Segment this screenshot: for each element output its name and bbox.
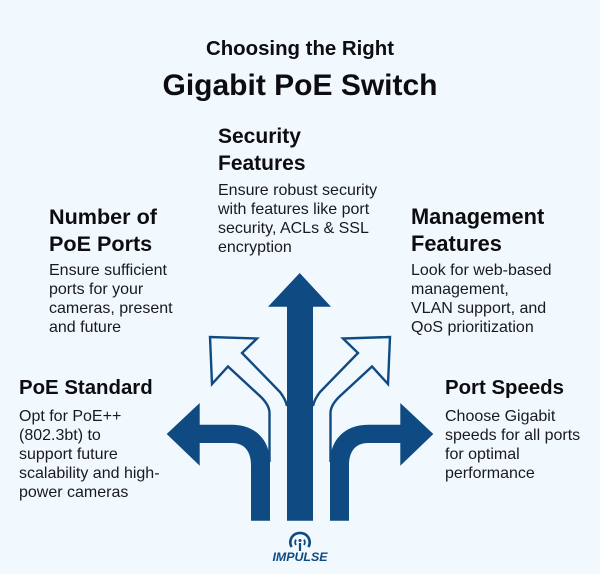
text: port speeds: performance bbox=[445, 465, 535, 482]
text: port speeds: for optimal bbox=[445, 446, 520, 463]
arrow: left outline bbox=[210, 337, 287, 462]
heading: number of PoE ports: Number of bbox=[49, 204, 157, 229]
text: number of PoE ports: ports for your bbox=[49, 281, 143, 298]
logo: Impulse bbox=[272, 532, 328, 564]
heading: management features: Management bbox=[411, 204, 544, 229]
panel: port speeds bbox=[445, 377, 580, 482]
arrow: left solid bbox=[167, 403, 270, 521]
heading: management features bbox=[411, 204, 544, 256]
text: security features: Ensure robust security bbox=[218, 182, 377, 199]
heading: security features bbox=[218, 125, 306, 175]
heading: number of PoE ports: PoE Ports bbox=[49, 231, 152, 256]
panel: number of PoE ports bbox=[49, 204, 173, 336]
text: PoE standard: scalability and high- bbox=[19, 465, 160, 482]
text: security features: with features like port bbox=[218, 201, 369, 218]
panel: PoE standard bbox=[19, 377, 160, 501]
text: port speeds bbox=[445, 408, 580, 482]
text: management features bbox=[411, 262, 552, 336]
text: PoE standard: power cameras bbox=[19, 484, 128, 501]
title line 2: Gigabit PoE Switch bbox=[162, 69, 438, 102]
arrow: right solid bbox=[330, 403, 433, 521]
title bbox=[162, 38, 438, 102]
heading: security features: Security bbox=[218, 125, 301, 148]
text: PoE standard bbox=[19, 408, 160, 501]
heading: port speeds: Port Speeds bbox=[445, 377, 564, 399]
arrow: right outline bbox=[313, 337, 390, 462]
text: management features: QoS prioritization bbox=[411, 319, 534, 336]
text: number of PoE ports: Ensure sufficient bbox=[49, 262, 167, 279]
arrows diagram bbox=[166, 273, 434, 521]
heading: security features: Features bbox=[218, 152, 306, 175]
icon: signal tower bbox=[288, 532, 312, 551]
text: management features: Look for web-based bbox=[411, 262, 552, 279]
text: number of PoE ports bbox=[49, 262, 173, 336]
heading: number of PoE ports bbox=[49, 204, 157, 256]
text: security features: security, ACLs & SSL bbox=[218, 220, 369, 237]
text: number of PoE ports: cameras, present bbox=[49, 300, 173, 317]
text: management features: management, bbox=[411, 281, 509, 298]
text: PoE standard: support future bbox=[19, 446, 118, 463]
title line 1: Choosing the Right bbox=[206, 38, 394, 60]
text: port speeds: speeds for all ports bbox=[445, 427, 580, 444]
panel: management features bbox=[411, 204, 552, 336]
heading: management features: Features bbox=[411, 231, 502, 256]
text: security features bbox=[218, 182, 378, 256]
text: number of PoE ports: and future bbox=[49, 319, 121, 336]
arrow: centre up bbox=[268, 273, 331, 521]
text: port speeds: Choose Gigabit bbox=[445, 408, 555, 425]
wordmark: IMPULSE bbox=[272, 550, 328, 564]
text: PoE standard: Opt for PoE++ bbox=[19, 408, 121, 425]
panel: security features bbox=[218, 125, 378, 256]
text: management features: VLAN support, and bbox=[411, 300, 546, 317]
text: security features: encryption bbox=[218, 239, 292, 256]
text: PoE standard: (802.3bt) to bbox=[19, 427, 101, 444]
heading: PoE standard: PoE Standard bbox=[19, 377, 153, 399]
